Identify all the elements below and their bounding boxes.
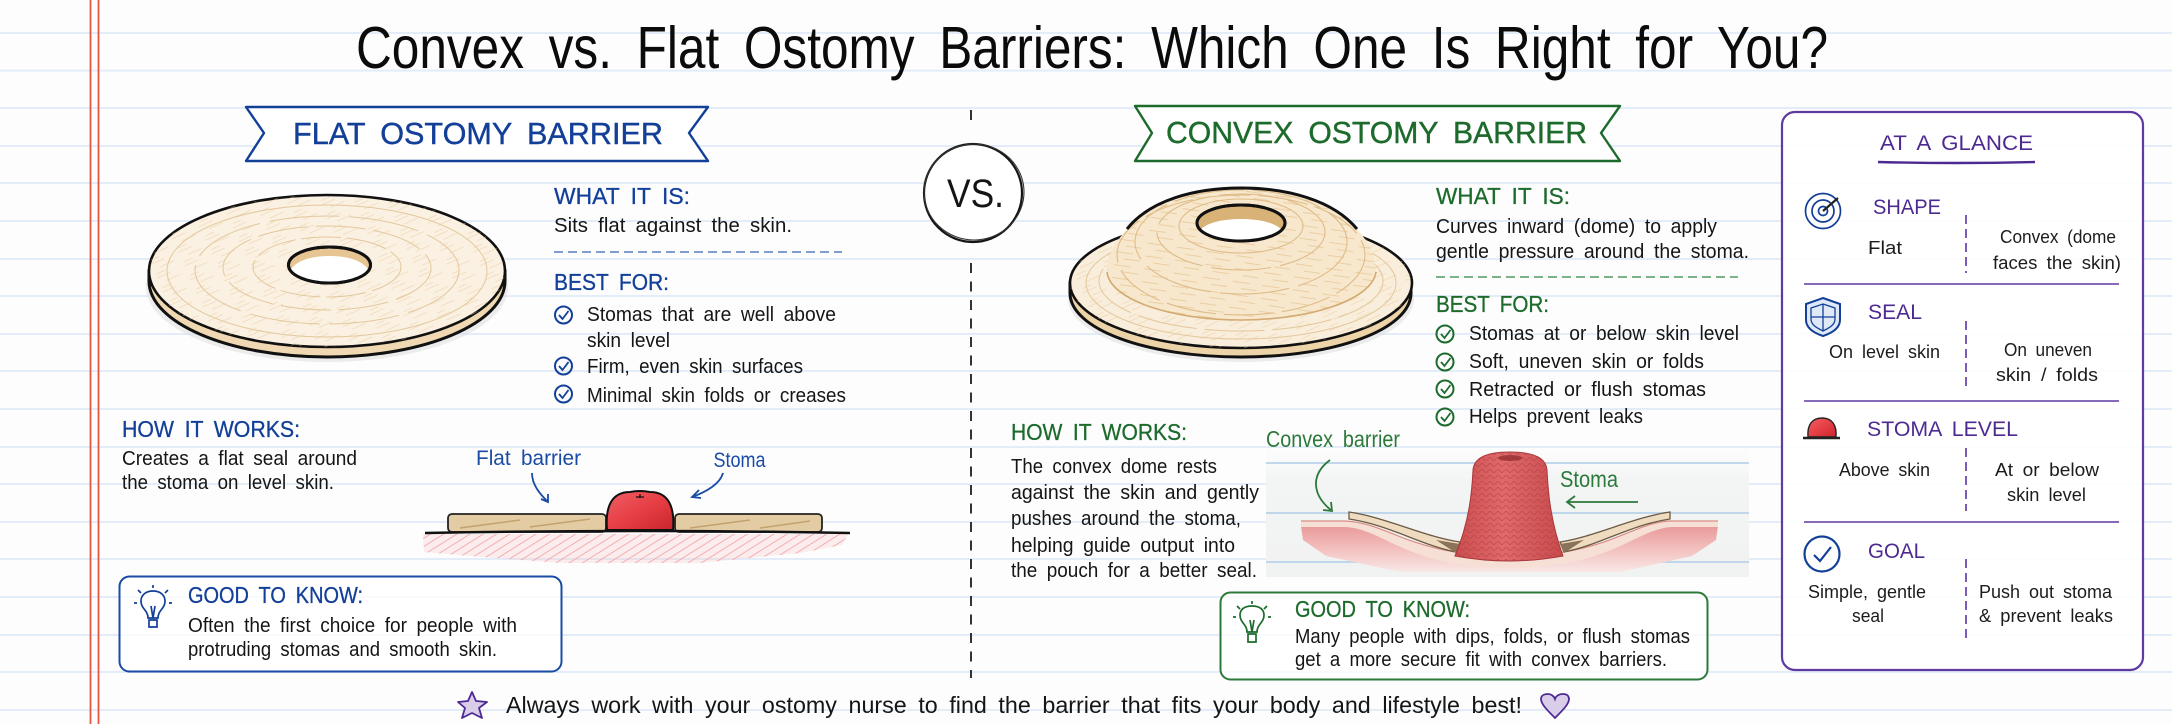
- red margin lines: [90, 0, 98, 724]
- row: goal: Simple, gentle: [1808, 581, 1926, 602]
- label: convex barrier: Convex barrier: [1266, 426, 1400, 452]
- callout: good to know, convex: [1220, 592, 1708, 680]
- banner: convex ostomy barrier: CONVEX OSTOMY BARRIER: [1166, 115, 1587, 150]
- best for: convex: [1436, 291, 1739, 428]
- row: shape: Convex (dome: [2000, 226, 2116, 247]
- callout: good to know, convex: GOOD TO KNOW:: [1295, 596, 1470, 622]
- how it works: flat: Creates a flat seal around: [122, 447, 357, 470]
- label: convex barrier: [1266, 426, 1400, 511]
- what it is: convex: [1436, 183, 1749, 263]
- how it works: convex: HOW IT WORKS:: [1011, 419, 1187, 445]
- callout: good to know, convex: get a more secure fit with convex barriers.: [1295, 648, 1667, 671]
- callout: good to know, flat: protruding stomas and smooth skin.: [188, 638, 497, 661]
- how it works: convex: The convex dome rests: [1011, 455, 1217, 478]
- check item 1: Stomas that are well above: [587, 303, 836, 326]
- callout: good to know, flat: GOOD TO KNOW:: [188, 582, 363, 608]
- row: goal: & prevent leaks: [1979, 605, 2113, 626]
- vs badge: VS.: [947, 172, 1004, 216]
- row: seal: [1806, 298, 2098, 385]
- check item 1: Stomas at or below skin level: [1469, 322, 1739, 345]
- label: stoma: [692, 449, 766, 498]
- center divider: [970, 110, 972, 678]
- row: stoma level: At or below: [1995, 459, 2100, 480]
- check item 2: Soft, uneven skin or folds: [1469, 350, 1704, 373]
- how it works: flat: HOW IT WORKS:: [122, 416, 300, 442]
- check item 3: Minimal skin folds or creases: [587, 384, 846, 407]
- icon: light bulb: [134, 585, 172, 627]
- row: goal: GOAL: [1868, 540, 1925, 563]
- what it is: flat: [554, 183, 792, 237]
- footer note: Always work with your ostomy nurse to find the barrier that fits your body and lifestyle best!: [506, 692, 1522, 718]
- row: goal: Push out stoma: [1979, 581, 2113, 602]
- label: stoma: Stoma: [714, 449, 766, 472]
- label: flat barrier: Flat barrier: [476, 447, 581, 470]
- row: seal: skin / folds: [1996, 364, 2098, 385]
- label: stoma: [1560, 466, 1638, 508]
- check item 2: Firm, even skin surfaces: [587, 355, 803, 378]
- icon: check circle: [1804, 536, 1840, 572]
- what it is: convex: gentle pressure around the stoma.: [1436, 240, 1749, 263]
- how it works: flat: [122, 416, 357, 494]
- label: stoma: Stoma: [1560, 466, 1618, 492]
- title: Convex vs. Flat Ostomy Barriers: Which One Is Right for You?: [356, 15, 1828, 81]
- check item 1: [555, 303, 836, 352]
- row: shape: [1806, 194, 2121, 273]
- what it is: convex: Curves inward (dome) to apply: [1436, 215, 1718, 238]
- how it works: convex: [1011, 419, 1260, 582]
- panel heading: AT A GLANCE: [1880, 132, 2033, 155]
- what it is: flat: Sits flat against the skin.: [554, 214, 792, 237]
- barrier wedges: [1349, 512, 1460, 552]
- what it is: flat: WHAT IT IS:: [554, 183, 690, 209]
- best for: flat: BEST FOR:: [554, 269, 669, 295]
- banner: flat ostomy barrier: FLAT OSTOMY BARRIER: [293, 116, 663, 151]
- illustration: convex barrier dome: [1068, 188, 1414, 362]
- vs badge: [924, 144, 1024, 242]
- callout: good to know, flat: Often the first choice for people with: [188, 614, 517, 637]
- banner: convex ostomy barrier: [1135, 106, 1620, 161]
- stoma: [1455, 452, 1563, 561]
- row: seal: On uneven: [2004, 339, 2092, 360]
- check item 1: skin level: [587, 329, 670, 352]
- row: goal: [1804, 536, 2113, 626]
- stoma: [607, 491, 673, 530]
- icon: star: [458, 692, 487, 718]
- what it is: convex: WHAT IT IS:: [1436, 183, 1570, 209]
- row: seal: On level skin: [1829, 341, 1940, 362]
- check item 4: Helps prevent leaks: [1469, 405, 1643, 428]
- illustration: flat barrier disc: [146, 195, 508, 362]
- icon: stoma: [1803, 418, 1840, 438]
- diagram: flat barrier on skin: [423, 447, 850, 563]
- how it works: flat: the stoma on level skin.: [122, 471, 334, 494]
- row: stoma level: skin level: [2007, 484, 2086, 505]
- callout: good to know, flat: [120, 576, 562, 672]
- how it works: convex: helping guide output into: [1011, 534, 1235, 557]
- row: stoma level: STOMA LEVEL: [1867, 418, 2018, 441]
- icon: target: [1806, 194, 1840, 228]
- panel: at a glance: [1782, 112, 2143, 670]
- row: shape: SHAPE: [1873, 196, 1941, 219]
- how it works: convex: pushes around the stoma,: [1011, 507, 1241, 530]
- label: flat barrier: [476, 447, 581, 502]
- diagram: convex barrier on skin: [1266, 426, 1749, 577]
- best for: flat: [554, 269, 846, 407]
- how it works: convex: against the skin and gently: [1011, 481, 1260, 504]
- row: shape: Flat: [1868, 237, 1902, 258]
- row: goal: seal: [1852, 605, 1884, 626]
- row: stoma level: [1803, 418, 2100, 505]
- icon: shield: [1806, 298, 1840, 336]
- row: stoma level: Above skin: [1839, 459, 1930, 480]
- row: seal: SEAL: [1868, 301, 1922, 324]
- icon: light bulb: [1233, 601, 1271, 642]
- icon: heart: [1541, 694, 1569, 718]
- best for: convex: BEST FOR:: [1436, 291, 1549, 317]
- row: shape: faces the skin): [1993, 252, 2121, 273]
- check item 3: Retracted or flush stomas: [1469, 378, 1706, 401]
- skin: [1301, 526, 1718, 572]
- how it works: convex: the pouch for a better seal.: [1011, 559, 1257, 582]
- callout: good to know, convex: Many people with dips, folds, or flush stomas: [1295, 625, 1690, 648]
- banner: flat ostomy barrier: [246, 107, 708, 161]
